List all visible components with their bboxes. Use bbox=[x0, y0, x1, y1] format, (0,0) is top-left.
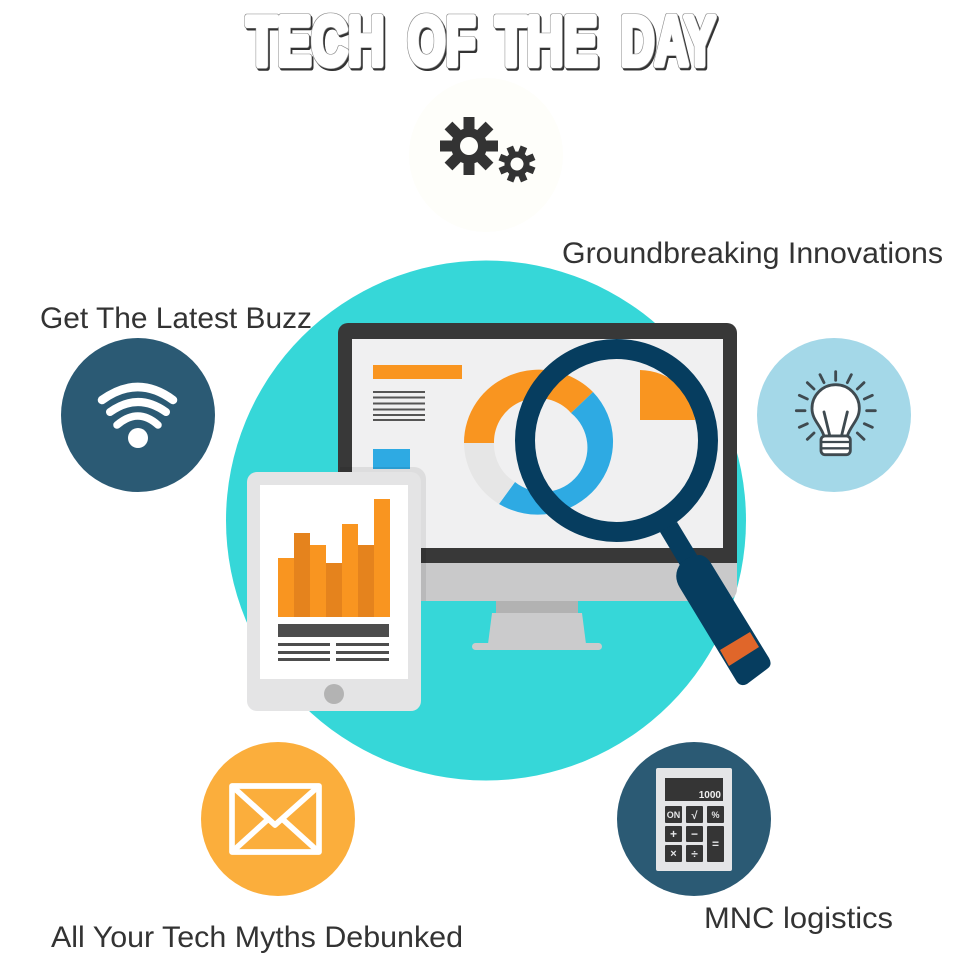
icon: calculator: √ bbox=[691, 810, 698, 822]
tablet button bbox=[324, 684, 344, 704]
icon: gears bbox=[409, 78, 563, 232]
title: DAY bbox=[620, 2, 716, 80]
title: THE bbox=[496, 2, 598, 80]
pie slice bbox=[640, 370, 695, 420]
icon: calculator: 1000 bbox=[699, 790, 721, 801]
icon: calculator: − bbox=[691, 827, 698, 841]
tablet text bars bbox=[278, 624, 389, 661]
icon: calculator: ÷ bbox=[691, 847, 698, 861]
icon: calculator: + bbox=[670, 827, 677, 841]
icon: calculator: = bbox=[712, 837, 719, 851]
bar chart bbox=[278, 499, 390, 617]
label: MNC logistics: MNC logistics bbox=[704, 902, 893, 935]
orange heading bar bbox=[373, 365, 462, 379]
main teal circle bbox=[226, 260, 746, 780]
icon: calculator bbox=[617, 742, 771, 896]
monitor bbox=[338, 323, 737, 650]
donut chart bbox=[464, 370, 613, 515]
text lines bbox=[373, 391, 425, 421]
label: All Your Tech Myths Debunked: All Your Tech Myths Debunked bbox=[51, 921, 463, 954]
magnifying glass bbox=[525, 349, 771, 685]
title: OF bbox=[408, 2, 476, 80]
title: TECH bbox=[246, 2, 384, 80]
icon: calculator: ON bbox=[667, 810, 680, 820]
tablet shadow bbox=[340, 467, 426, 601]
monitor body bbox=[338, 323, 737, 563]
icon: envelope bbox=[201, 742, 355, 896]
monitor stand bbox=[472, 600, 602, 650]
icon: calculator: % bbox=[711, 810, 720, 820]
icon: light bulb bbox=[757, 338, 911, 492]
blue block bbox=[373, 449, 410, 469]
label: Get The Latest Buzz: Get The Latest Buzz bbox=[40, 302, 312, 335]
icon: wifi bbox=[61, 338, 215, 492]
monitor screen bbox=[352, 339, 723, 548]
label: Groundbreaking Innovations: Groundbreaking Innovations bbox=[562, 237, 943, 270]
tablet bbox=[247, 472, 421, 711]
icon: calculator: × bbox=[670, 848, 677, 860]
title bbox=[246, 2, 716, 80]
